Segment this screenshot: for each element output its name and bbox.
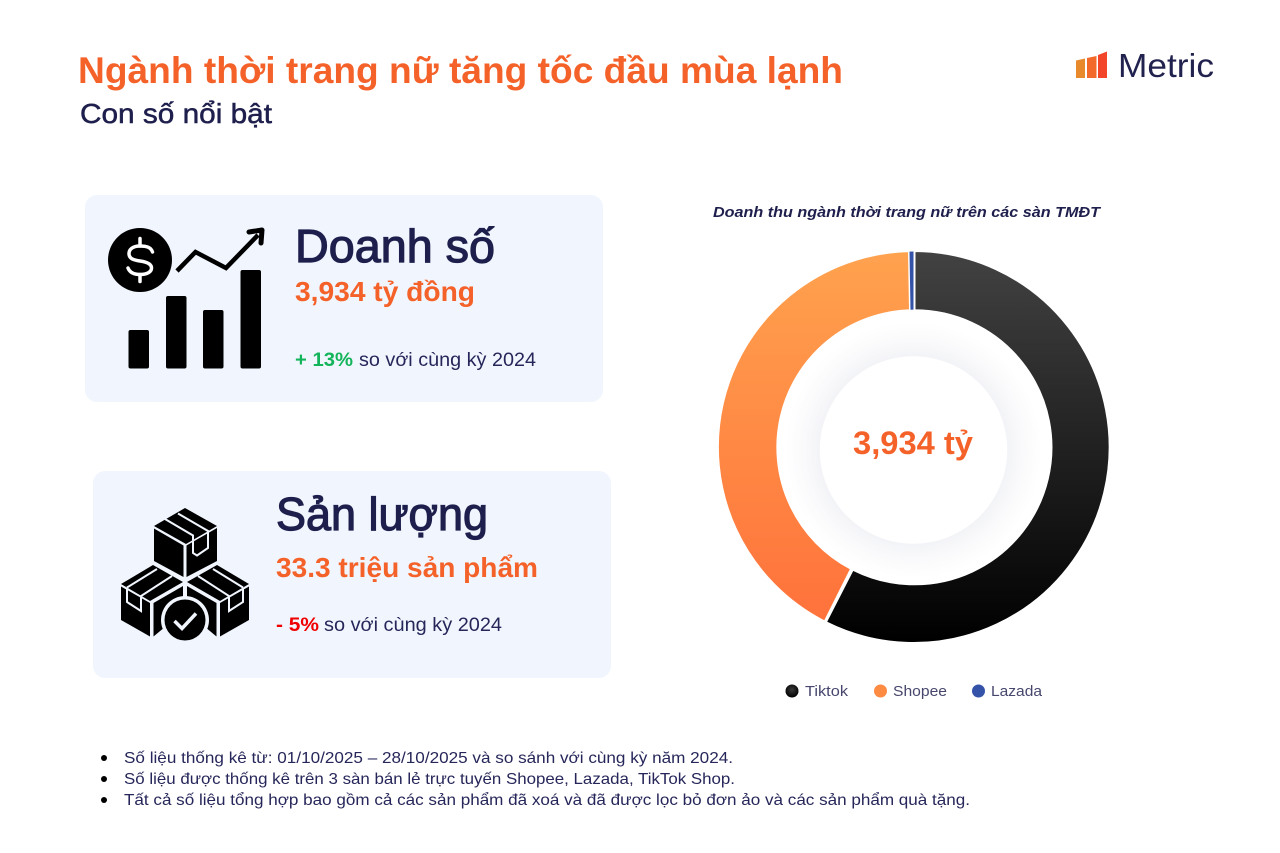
legend — [786, 683, 1043, 700]
comparison: +13%: + 13% — [295, 350, 353, 371]
panel background — [85, 195, 603, 402]
icon: revenue chart with dollar coin — [108, 228, 262, 368]
center disc — [820, 356, 1007, 544]
logo icon bars — [1076, 52, 1107, 78]
value: 33.3 triệu sản phẩm: 33.3 triệu sản phẩm — [276, 552, 538, 583]
legend: Shopee: Shopee — [893, 683, 947, 700]
center shadow — [786, 322, 1042, 578]
segment: Lazada — [910, 252, 914, 310]
icon: boxes with check mark — [121, 508, 249, 644]
top box — [154, 508, 217, 577]
legend: Tiktok: Tiktok — [805, 683, 849, 700]
title: Ngành thời trang nữ tăng tốc đầu mùa lạnh — [78, 50, 843, 91]
heading: Doanh số: Doanh số — [295, 220, 495, 272]
comparison: -5%: - 5% — [276, 615, 319, 636]
logo wordmark: Metric — [1118, 47, 1214, 84]
legend: Tiktok — [786, 683, 849, 700]
note 1: Số liệu thống kê từ: 01/10/2025 – 28/10/2025 và so sánh với cùng kỳ năm 2024. — [124, 750, 733, 767]
legend: Lazada — [972, 683, 1043, 700]
comparison: -5%: so với cùng kỳ 2024 — [324, 615, 502, 636]
comparison: +13%: so với cùng kỳ 2024 — [359, 350, 536, 371]
panel: Doanh số — [85, 195, 603, 402]
right box — [187, 565, 249, 636]
legend: Lazada: Lazada — [991, 683, 1043, 700]
value: 3,934 tỷ đồng: 3,934 tỷ đồng — [295, 276, 475, 307]
segment: Shopee — [718, 252, 910, 621]
panel background — [93, 471, 611, 678]
left box — [121, 565, 183, 636]
center value: 3,934 tỷ — [853, 425, 973, 461]
donut chart panel — [713, 204, 1109, 700]
chart title: Doanh thu ngành thời trang nữ trên các sàn TMĐT — [713, 204, 1102, 221]
footnotes — [101, 750, 970, 809]
donut chart — [718, 252, 1109, 642]
check badge — [161, 596, 209, 644]
panel: Sản lượng — [93, 471, 611, 678]
logo: Metric — [1076, 47, 1214, 84]
note 2: Số liệu được thống kê trên 3 sàn bán lẻ trực tuyến Shopee, Lazada, TikTok Shop. — [124, 771, 735, 788]
subtitle: Con số nổi bật — [80, 98, 272, 129]
segment: Tiktok — [826, 252, 1109, 642]
note 3: Tất cả số liệu tổng hợp bao gồm cả các sản phẩm đã xoá và đã được lọc bỏ đơn ảo và các sản phẩm quà tặng. — [124, 791, 970, 809]
heading: Sản lượng: Sản lượng — [276, 488, 488, 540]
